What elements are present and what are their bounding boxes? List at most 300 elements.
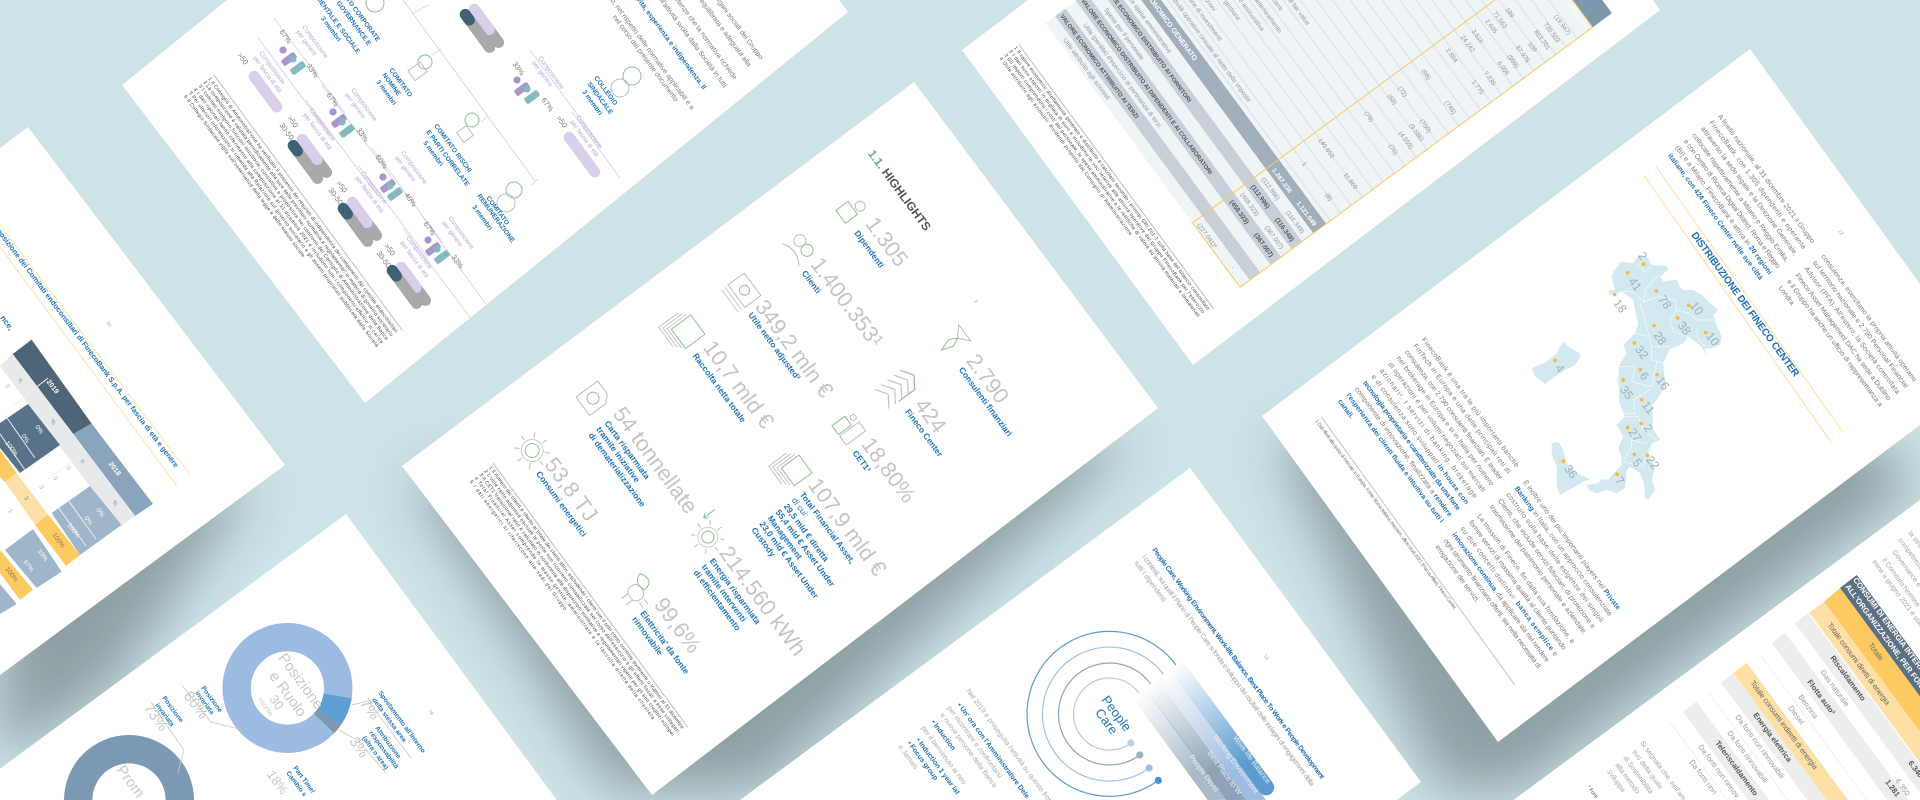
footnotes: 1 Il numero dei clienti è riferito al totale dei clienti attivi, escludendo i clienti con il solo conto corrente dormiente o inattivo al 31 dicembre bbox=[487, 465, 685, 730]
map of Italy bbox=[1532, 249, 1722, 500]
table values: 100% bbox=[50, 532, 66, 550]
body text: costruito sulla base delle esigenze dei singoli bbox=[1504, 492, 1605, 624]
body text: sul territorio nazionale e 2.790 Personal Financial bbox=[1811, 260, 1909, 390]
page number: 85 bbox=[104, 321, 113, 329]
composition captions: Composizione bbox=[257, 50, 287, 86]
People Care label: Care bbox=[1092, 706, 1121, 737]
economic value table: Utile (perdita) d'esercizio di pertinenza di terzi bbox=[1081, 22, 1163, 129]
initiatives text: • Induction 1 year lat bbox=[914, 737, 961, 797]
stat: total financial assets: 29,5 mld € diretta bbox=[782, 502, 831, 564]
economic value table: (278.928) bbox=[1565, 2, 1587, 27]
composition captions: per genere bbox=[343, 92, 367, 121]
intro text: People Care, Working Environment, Work-life Balance, Best Place To Work e People Development bbox=[1150, 547, 1326, 781]
stat: Fineco centers: 424 bbox=[910, 393, 952, 438]
bar labels: Working Environment bbox=[1211, 733, 1260, 795]
lower paragraph: tivo della quale bbox=[1630, 749, 1664, 791]
page number: 8 bbox=[972, 299, 979, 305]
stat: paper saved bbox=[564, 374, 703, 536]
stat: renewable electricity: rinnovabile bbox=[630, 615, 665, 657]
economic value table: VALORE ECONOMICO DISTRIBUITO AI DIPENDENTI E AI COLLABORATORI bbox=[1079, 0, 1213, 176]
page number: 19 bbox=[1261, 654, 1270, 662]
economic value table: 6.006 bbox=[1496, 60, 1511, 77]
composition captions: per fascia di età bbox=[353, 175, 385, 215]
economic value table: (227.041)* bbox=[1195, 222, 1219, 250]
percentage labels: 67% bbox=[277, 28, 294, 46]
map of Italy: 27 bbox=[1625, 425, 1645, 445]
heading: 1.1. HIGHLIGHTS bbox=[865, 147, 934, 233]
map of Italy: 5 bbox=[1630, 456, 1645, 470]
body text: canali. bbox=[1336, 398, 1355, 420]
percentage labels: 60% bbox=[373, 153, 390, 171]
stat: clients: Clienti bbox=[800, 268, 823, 295]
donut chart: promotion bbox=[64, 735, 194, 800]
economic value table: 720.503 bbox=[1542, 22, 1561, 45]
economic value table: 7.235 bbox=[1482, 70, 1497, 87]
body text: trasmissione del patrimonio personale e aziendale. bbox=[1488, 504, 1588, 636]
top paragraph: il Comitato Nomine bbox=[1880, 557, 1920, 609]
table values: 67% bbox=[21, 559, 35, 574]
economic value table: (112.996) bbox=[1260, 176, 1281, 202]
economic value table: (116.349) bbox=[1284, 209, 1305, 235]
body text: Advisor (PFA). All'estero, la Società controllata bbox=[1802, 266, 1901, 396]
body text: FinTech in Europa e una delle principali reti di bbox=[1411, 343, 1512, 475]
economic value table: (748) bbox=[1443, 100, 1457, 116]
page number: 12 bbox=[1836, 229, 1845, 237]
committee labels: COMITATO bbox=[484, 195, 510, 227]
body text: Clienti, che include servizi fiduciari, di protezione e bbox=[1496, 498, 1596, 630]
table labels: Da fonti rinn bbox=[1687, 758, 1719, 796]
committee labels: 5 membri bbox=[421, 140, 445, 168]
stat: paper saved: 54 tonnellate bbox=[608, 402, 703, 518]
lower paragraph bbox=[1585, 740, 1687, 800]
composition captions: per genere bbox=[440, 220, 464, 249]
footnotes: 2 La composizione è valutata periodicamente alla luce delle previsioni normative e regolamentari in materia di governo societario bbox=[202, 80, 394, 338]
committee labels: COLLEGIO bbox=[592, 75, 618, 107]
composition captions: Composizione bbox=[399, 150, 429, 186]
economic value table: (367.007) bbox=[1252, 232, 1274, 259]
donut chart: position and role: risorse bbox=[256, 697, 274, 718]
stat: energy consumption: 53,8 TJ bbox=[540, 453, 603, 526]
body text: FinecoBank, con 1.305 dipendenti e operante bbox=[1708, 120, 1807, 251]
committee icons bbox=[366, 0, 641, 212]
composition captions: Composizione bbox=[404, 235, 434, 271]
stat: total financial assets: 55,4 mld € Asset Under bbox=[774, 508, 837, 589]
table values: 33% bbox=[35, 548, 49, 563]
panel: governance committees page bbox=[122, 0, 848, 403]
stat: total financial assets: di cui: bbox=[790, 496, 811, 519]
economic value table: (79) bbox=[1362, 110, 1375, 123]
body text: tecnologia proprietaria e caratterizzate da una forte bbox=[1361, 380, 1461, 512]
donut callouts: 7% bbox=[356, 696, 383, 723]
footnotes: 6 Il Collegio Sindacale vigila sull'osservanza della legge e dello statuto sociale bbox=[182, 94, 306, 259]
body text: su due concetti distintivi: banca semplice e bbox=[1459, 526, 1559, 658]
panel: economic value table page bbox=[962, 0, 1660, 365]
body text: erogazione dei servizi. bbox=[1433, 544, 1480, 604]
section title: DISTRIBUZIONE DEI FINECO CENTER bbox=[1689, 230, 1801, 380]
map of Italy: 18 bbox=[1610, 296, 1630, 316]
page sheet bbox=[962, 0, 1660, 365]
economic value table: 2.894 bbox=[1444, 47, 1459, 65]
percentage labels: 30-50 bbox=[374, 249, 393, 270]
table values: 2018 bbox=[107, 461, 122, 478]
stat: clients: 1.400.353¹ bbox=[806, 252, 888, 352]
stat: CET1 ratio bbox=[830, 407, 921, 513]
table values: 0% bbox=[82, 515, 94, 527]
table labels: Gas naturale bbox=[1818, 668, 1851, 708]
economic value table: 71.563 bbox=[1491, 10, 1508, 30]
initiatives text: per incontrare e confrontarsi bbox=[945, 705, 1003, 780]
panel: donut charts page bbox=[0, 514, 557, 800]
economic value table: 853.201 bbox=[1532, 29, 1552, 52]
body text: l'esperienza dei clienti fluida e intuitiva su tutti i bbox=[1344, 392, 1444, 524]
economic value table: 1.121.049 bbox=[1294, 200, 1317, 228]
map of Italy: 32 bbox=[1632, 343, 1651, 362]
economic value table: (112.996) bbox=[1249, 184, 1271, 210]
initiatives text: e nuove persone della Banca bbox=[938, 712, 998, 789]
map of Italy: 36 bbox=[1561, 462, 1580, 481]
body text: (BI) e a Milano. FinecoBank è attiva in 20 regioni bbox=[1673, 145, 1773, 276]
map of Italy: 35 bbox=[1617, 383, 1636, 402]
initiatives text: • Focus group bbox=[905, 740, 939, 782]
composition captions: Composizione bbox=[359, 170, 389, 206]
body text: e con Centro di Ricerca Digital District, Roma e Reggio bbox=[1682, 139, 1781, 270]
stat: energy saved bbox=[667, 507, 814, 678]
table values: 3 bbox=[22, 496, 30, 502]
table labels: Benzina bbox=[1796, 693, 1820, 721]
map of Italy: 78 bbox=[1655, 293, 1675, 312]
table values: 0 bbox=[64, 466, 72, 472]
body text bbox=[1327, 113, 1920, 677]
donut callouts: Posizione bbox=[199, 685, 223, 714]
stat: total financial assets: Custody bbox=[750, 525, 778, 559]
stat: total financial assets: 23,0 mld € Asset Under bbox=[758, 519, 821, 601]
stat: employees: 1.305 bbox=[861, 212, 913, 271]
table cells bbox=[0, 340, 153, 614]
footnotes: 3 I comitati svolgono funzioni istruttorie, consultive e propositive nei confronti del Consiglio di Amministrazione della Banca bbox=[197, 83, 389, 342]
percentage labels: 33% bbox=[510, 60, 527, 78]
initiatives text bbox=[896, 688, 1058, 800]
economic value table bbox=[1045, 0, 1612, 287]
stat: financial advisors: 2.790 bbox=[961, 349, 1014, 408]
table labels: Da fonti rinnovabili bbox=[1725, 729, 1770, 785]
committee labels: REMUNERAZIONE bbox=[475, 193, 516, 245]
composition captions: per fascia di età bbox=[301, 112, 333, 152]
initiatives text: • Induction bbox=[929, 719, 956, 752]
stat: paper saved: Carta risparmiata bbox=[603, 419, 652, 481]
stat: CET1 ratio: CET1³ bbox=[851, 448, 873, 474]
percentage labels: 40% bbox=[402, 191, 419, 209]
footnotes: 4 I dati riportati fanno riferimento alla composizione al 31 dicembre 2021 e includono tutti i componenti effettivi in carica bbox=[192, 87, 384, 345]
map of Italy: 22 bbox=[1643, 453, 1662, 472]
footnotes: 5 I dati energetici si riferiscono alle sedi del Gruppo bbox=[468, 479, 568, 612]
committee labels: 3 membri bbox=[374, 79, 398, 107]
map of Italy: 10 bbox=[1703, 329, 1722, 349]
lower paragraph: sviluppa bbox=[1605, 769, 1626, 794]
economic value table: 1.770 bbox=[1470, 79, 1485, 96]
body text: A livello nazionale, al 31 dicembre 2021 il Gruppo bbox=[1716, 113, 1815, 245]
body text: ogni strumento finanziario offerti, sia nella necessità di bbox=[1442, 538, 1542, 670]
economic value table: (750) bbox=[1418, 118, 1432, 134]
map of Italy: 4 bbox=[1552, 361, 1568, 375]
stat: net inflows: 10,7 mld € bbox=[698, 336, 779, 433]
composition captions: Composizione bbox=[446, 215, 476, 251]
composition captions: per genere bbox=[530, 60, 554, 89]
body text: italiane, con 424 Fineco Center nelle sue città bbox=[1666, 153, 1764, 282]
page sheet bbox=[0, 514, 557, 800]
table values: 1 bbox=[6, 509, 14, 515]
page sheet bbox=[1262, 49, 1920, 742]
initiatives text: • Un' ora con l'Amministratore Dele bbox=[955, 702, 1030, 800]
body text: FinecoBank è una tra le più importanti banche bbox=[1420, 337, 1520, 469]
stat: renewable electricity: 99,6% bbox=[649, 593, 706, 658]
percentage labels: 33% bbox=[304, 62, 321, 80]
composition captions: Composizione bbox=[574, 114, 604, 150]
economic value table: (468.323) bbox=[1239, 192, 1260, 218]
composition captions: per fascia di età bbox=[251, 55, 283, 95]
body text: La mission di Fineco, fin dalla sua fondazione, è bbox=[1475, 513, 1575, 645]
double yellow rule bbox=[0, 225, 190, 486]
body text: di operazioni e per volumi negoziati sui mercati bbox=[1386, 361, 1487, 494]
committee labels: COMITATO bbox=[387, 67, 413, 99]
table values: 100% bbox=[3, 566, 19, 584]
percentage labels: >50 bbox=[382, 242, 397, 257]
body text: collocate rispettivamente a Milano e Reggio Emilia, bbox=[1690, 132, 1790, 264]
percentage labels: >50 bbox=[235, 51, 250, 66]
stat: energy saved: Energia risparmiata bbox=[708, 556, 763, 626]
body text: e di consulenza sono sviluppati in-house con bbox=[1370, 374, 1470, 506]
donut callouts: Spostamento all'interno bbox=[376, 690, 426, 754]
percentage labels: >50 bbox=[285, 114, 300, 129]
donut callouts: della stessa area bbox=[370, 697, 408, 744]
stat: renewable electricity bbox=[611, 566, 714, 682]
footnotes: 1 Il valore economico direttamente generato e distribuito è calcolato secondo i principi GRI 201-1 sulla base del bilancio consolidato bbox=[1012, 45, 1211, 312]
donut callouts: 73% bbox=[140, 700, 171, 734]
stat: Fineco centers: Fineco Center bbox=[903, 407, 945, 459]
donut callouts: 3% bbox=[345, 734, 372, 761]
table values: 0 bbox=[51, 476, 59, 482]
economic value table: 87.978 bbox=[1514, 44, 1531, 65]
economic value table: (19.947) bbox=[1552, 14, 1572, 37]
body text: Fineco Asset Management DAC ha sede a Dublino bbox=[1794, 272, 1892, 402]
economic value table: (999) bbox=[1506, 53, 1520, 69]
donut callouts: (altra o area) bbox=[360, 735, 390, 771]
economic value table: 140.853 bbox=[1316, 137, 1336, 160]
stat: adjusted net profit bbox=[722, 268, 838, 409]
stat: employees bbox=[835, 190, 913, 278]
panel: committee composition table page bbox=[0, 127, 285, 675]
donut callouts: Posizione bbox=[160, 695, 184, 724]
body text: innovazione continua, da applicare sia nel rendere bbox=[1450, 532, 1550, 664]
map of Italy: 6 bbox=[1637, 369, 1652, 383]
composition captions: per fascia di età bbox=[568, 119, 600, 159]
page shadows bbox=[0, 320, 1920, 790]
stat: energy saved: tramite interventi bbox=[700, 562, 749, 624]
committee labels bbox=[308, 0, 618, 245]
footnotes: 4 Total Financial Asset comprende le masse gestite, amministrate e la raccolta diretta della clientela bbox=[473, 476, 656, 721]
table labels: Flotta auto² bbox=[1805, 678, 1837, 717]
map of Italy: 11 bbox=[1639, 399, 1658, 417]
economic value table: (9.586) bbox=[1407, 123, 1425, 143]
page sheet bbox=[402, 82, 1158, 795]
body text: Londra. bbox=[1777, 285, 1796, 308]
table values: 3 bbox=[37, 485, 45, 491]
economic value table: (116.349) bbox=[1273, 217, 1295, 243]
table values: 2019 bbox=[45, 379, 60, 396]
stat: energy saved: 214.560 kWh bbox=[714, 541, 811, 660]
table values: 0% bbox=[19, 433, 31, 445]
committee labels: GOVERNANCE E bbox=[335, 0, 372, 48]
table values: 100% bbox=[3, 440, 19, 458]
footnote: 1 Dati riferiti alla quota di mercato in Europa. Fonte: Borsa Italiana, Assosim, ufficio studi 2021 (Piazza Affari), Fineco Center. bbox=[1313, 419, 1458, 611]
body text: consulenza, esercitano la propria attività operano bbox=[1819, 253, 1918, 383]
table values: 100% bbox=[65, 522, 81, 540]
table values: n. bbox=[16, 378, 24, 385]
stat: energy consumption bbox=[507, 424, 608, 542]
percentage labels: 30-50 bbox=[277, 121, 296, 142]
economic value table: (4.559) bbox=[1397, 130, 1414, 150]
bar labels: Best Place to W bbox=[1205, 749, 1244, 797]
table labels: Totale consumi indiretti di energia bbox=[1748, 679, 1820, 772]
page sheet bbox=[1514, 500, 1920, 800]
map of Italy: 41 bbox=[1625, 275, 1645, 294]
donut chart: position and role: 30 bbox=[266, 692, 287, 713]
table labels: Totale bbox=[1866, 641, 1886, 662]
stat: total financial assets bbox=[725, 442, 892, 621]
footnotes: 4 Utile attribuito agli azionisti: dividendi proposti dal Consiglio di Amministrazione bbox=[998, 56, 1133, 237]
economic value table: (72) bbox=[1396, 85, 1408, 98]
table labels: 1.281 bbox=[1883, 778, 1902, 799]
economic value table: (458.323) bbox=[1228, 199, 1250, 226]
concentric rings bbox=[1027, 631, 1176, 796]
double yellow rule bbox=[1644, 166, 1843, 443]
stat: paper saved: tramite iniziative bbox=[595, 425, 642, 484]
percentage labels: 67% bbox=[324, 91, 341, 109]
body text: azionari¹. I servizi di banking, brokerage bbox=[1378, 368, 1478, 500]
donut callouts: invariata bbox=[193, 690, 215, 716]
table bands bbox=[1670, 575, 1920, 800]
footnote bbox=[1313, 416, 1515, 685]
donut chart: position and role: Posizione bbox=[274, 650, 327, 713]
table labels: Diesel bbox=[1786, 704, 1806, 726]
stat: employees: Dipendenti bbox=[852, 228, 886, 270]
donut chart: position and role bbox=[237, 637, 352, 739]
composition captions: Composizione bbox=[307, 107, 337, 143]
page sheet bbox=[0, 127, 285, 675]
map of Italy: 28 bbox=[1650, 329, 1670, 348]
table labels bbox=[1687, 576, 1920, 800]
footnotes: 1 Il Consiglio di Amministrazione ha verificato il possesso dei requisiti di indipendenza dei componenti dei comitati endoconsiliari bbox=[206, 76, 399, 334]
body text: nel brokerage in Europa e si in Italia per numero bbox=[1395, 355, 1495, 487]
bar labels: People Devel bbox=[1187, 753, 1221, 794]
donut callouts: Part Time/ bbox=[291, 765, 316, 795]
bar labels bbox=[1187, 733, 1273, 797]
donut callouts: responsabilità bbox=[367, 730, 400, 770]
stacked bars by age bbox=[247, 2, 602, 311]
stat: energy saved: di efficientamento bbox=[692, 568, 743, 633]
body text: consulenza, con 2.790 consulenti finanziari. È leader bbox=[1403, 348, 1505, 482]
economic value table: (76) bbox=[1387, 143, 1399, 156]
table values: 0% bbox=[94, 507, 106, 519]
panel: highlights page bbox=[402, 82, 1158, 795]
stat: CET1 ratio: 18,80% bbox=[857, 433, 921, 507]
initiatives text: per il benvenuto ai neo bbox=[919, 725, 967, 786]
stat: renewable electricity: Elettricita' da fonte bbox=[638, 609, 692, 676]
committee labels: COMITATO RISCHI bbox=[432, 123, 473, 174]
lower paragraph: * Fonti bbox=[1585, 785, 1599, 800]
footnotes: 2 L'utile netto adjusted esclude le poste non ricorrenti contabilizzate nel corso dell'esercizio e gli effetti fiscali a esse collegati bbox=[482, 469, 680, 734]
lower paragraph: alla metodo bbox=[1613, 762, 1641, 795]
stat: net inflows bbox=[659, 302, 779, 444]
table values bbox=[3, 378, 122, 584]
percentage labels: 67% bbox=[539, 96, 556, 114]
intro text: i contesti, sui quali il Piano di People Care si fonda e sviluppa dei risultati delle indagini di engagement della bbox=[1140, 554, 1315, 788]
donut callouts: invariata bbox=[153, 702, 175, 728]
bar labels: Work life Balance bbox=[1231, 734, 1273, 785]
page number: 22 bbox=[1000, 275, 1009, 283]
table values: % bbox=[110, 500, 119, 508]
table labels: Energia elettrica bbox=[1751, 711, 1794, 764]
table values: n. bbox=[78, 459, 86, 466]
stat: total financial assets: Management bbox=[766, 513, 805, 561]
stat: net inflows: Raccolta netta totale bbox=[691, 351, 748, 424]
initiatives text: e Jamais bbox=[896, 744, 919, 771]
stat: total financial assets: Total Financial Asset, bbox=[798, 490, 857, 565]
economic value table: 2.605 bbox=[1483, 18, 1499, 35]
stat: Fineco centers bbox=[875, 364, 964, 464]
donut callouts: Attribuzione bbox=[373, 725, 402, 760]
body text bbox=[574, 0, 764, 111]
body text: attraverso la sede legale e la Direzione Generale, bbox=[1699, 126, 1799, 257]
footnotes: 3 Gli importi comprendono i costi del personale, le spese amministrative e le rettifiche di valore su attività materiali e immateriali bbox=[1003, 53, 1201, 319]
footnotes: 5 Per ulteriori informazioni si rimanda alla Relazione sul governo societario e gli assetti proprietari pubblicata dalla Società bbox=[187, 91, 380, 349]
composition captions bbox=[251, 24, 604, 280]
economic value table: (8) bbox=[1323, 192, 1334, 202]
donut callouts: 18% bbox=[264, 767, 292, 798]
table values: 0% bbox=[33, 424, 45, 436]
map of Italy: 16 bbox=[1653, 374, 1672, 393]
percentage labels: 30-50 bbox=[326, 186, 345, 207]
gender figures bbox=[279, 46, 541, 265]
stat: total financial assets: 107,9 mld € bbox=[803, 473, 892, 580]
economic value table: - bbox=[1229, 265, 1236, 271]
panel: Fineco Center map page bbox=[1262, 49, 1920, 742]
body text: e il Gruppo ha anche un ufficio di rappresentanza a bbox=[1785, 279, 1883, 408]
economic value table: 1.267.236 bbox=[1270, 167, 1293, 195]
economic value table: 1 bbox=[1300, 161, 1308, 168]
intro text: tutti i dipendenti bbox=[1132, 560, 1167, 604]
composition captions: per fascia di età bbox=[398, 240, 430, 280]
page sheet bbox=[740, 468, 1421, 800]
committee labels: 3 membri bbox=[319, 15, 342, 43]
map of Italy: 2 bbox=[1635, 249, 1651, 263]
percentage labels bbox=[235, 28, 569, 271]
percentage labels: >50 bbox=[554, 114, 569, 129]
panel: energy consumption table page bbox=[1514, 500, 1920, 800]
table values: 0 bbox=[3, 384, 11, 390]
footnotes: 3 Il CET1 transitional ratio è calcolato in conformità alle disposizioni normative e regolamentari vigenti per gli enti creditizi europei bbox=[478, 472, 675, 737]
stat: adjusted net profit: Utile netto adjusted² bbox=[746, 310, 803, 382]
map of Italy: 2 bbox=[1641, 421, 1656, 435]
body text: componente di innovazione, finalizzata a rendere bbox=[1353, 386, 1453, 518]
composition captions: per genere bbox=[294, 29, 318, 58]
body text: nel corso del presente documento bbox=[611, 14, 679, 103]
percentage labels: 33% bbox=[449, 253, 466, 271]
table labels: Da fonti non rinnov bbox=[1696, 743, 1742, 800]
table labels: Riscaldamento bbox=[1828, 654, 1868, 703]
economic value table: 189 bbox=[1503, 7, 1516, 20]
economic value table: (69) bbox=[1386, 93, 1398, 106]
People Care label: People bbox=[1099, 693, 1135, 734]
